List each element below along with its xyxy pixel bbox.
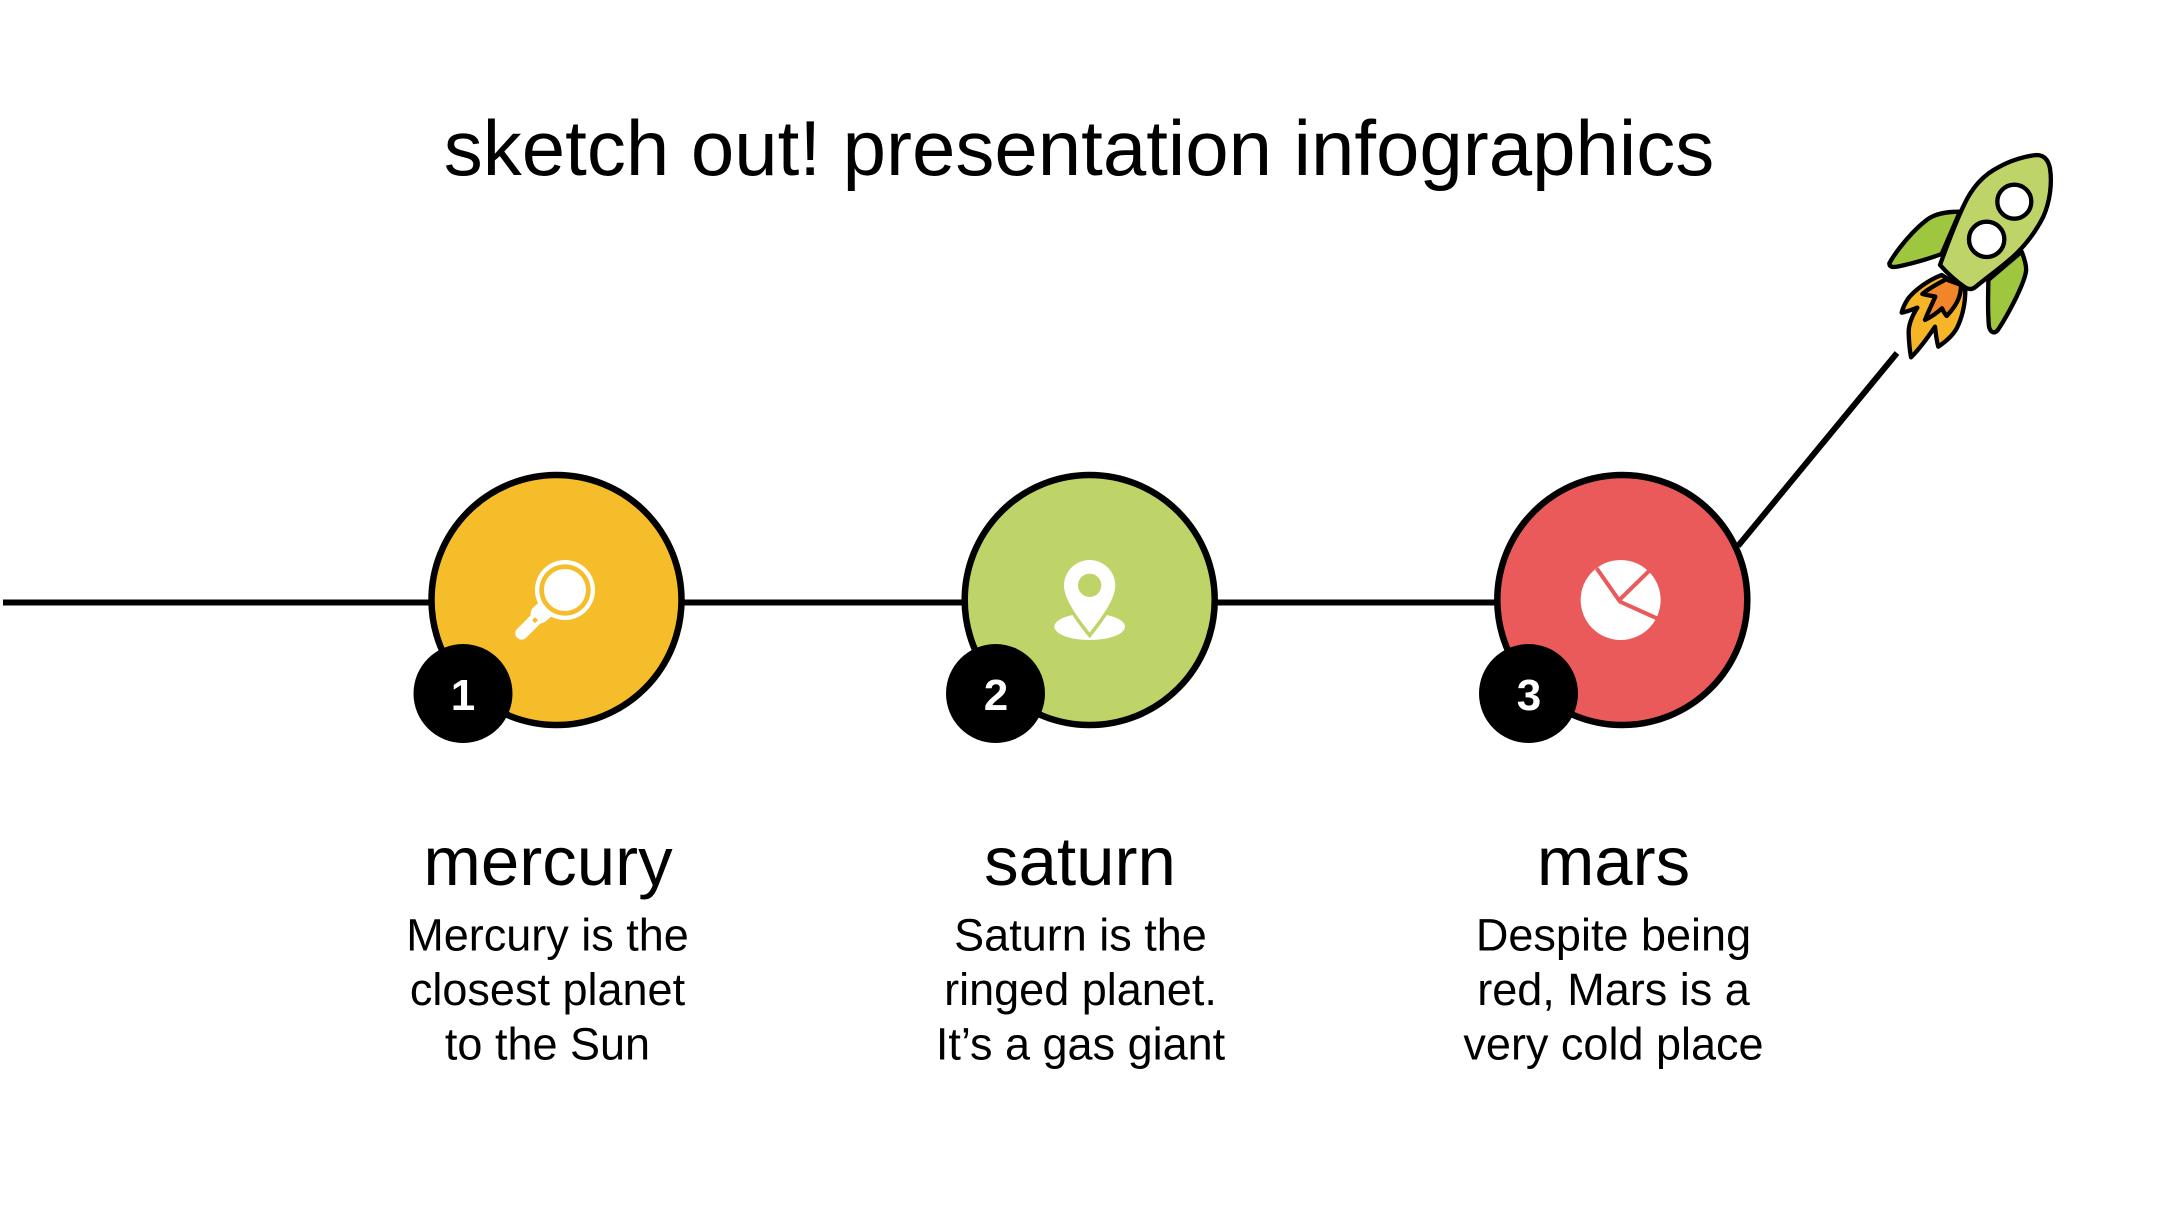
badge 2: 2 [984,671,1008,720]
heading: mercury: mercury [423,823,673,900]
text: saturn description: ringed planet. [944,964,1217,1015]
icon: magnifying glass [522,560,595,633]
icon: rocket [1889,155,2051,357]
title: sketch out! presentation infographics [444,104,1714,192]
circle 1 [432,475,682,725]
badge 3: 3 [1517,671,1541,720]
heading: saturn: saturn [984,823,1176,900]
step 2: saturn [936,475,1226,1070]
step 3: mars [1463,475,1764,1070]
text: mercury description: Mercury is the [406,910,689,960]
text: mars description: very cold place [1463,1018,1764,1070]
icon: map pin [1054,557,1125,640]
text: saturn description: Saturn is the [954,910,1207,960]
text: mercury description: closest planet [410,964,686,1015]
circle 2 [965,475,1215,725]
arrow: connector to rocket [1738,353,1897,546]
heading: mars: mars [1537,823,1690,900]
step 1: mercury [406,475,689,1070]
badge 1: 1 [451,671,475,720]
text: saturn description: It’s a gas giant [936,1018,1226,1070]
icon: pie chart [1581,560,1661,640]
timeline line [3,600,1625,606]
circle 3 [1497,475,1747,725]
text: mercury description: to the Sun [445,1018,650,1070]
text: mars description: red, Mars is a [1477,964,1751,1015]
badge 1 [414,644,512,743]
badge 2 [946,644,1045,743]
badge 3 [1479,644,1578,743]
text: mars description: Despite being [1476,910,1751,960]
